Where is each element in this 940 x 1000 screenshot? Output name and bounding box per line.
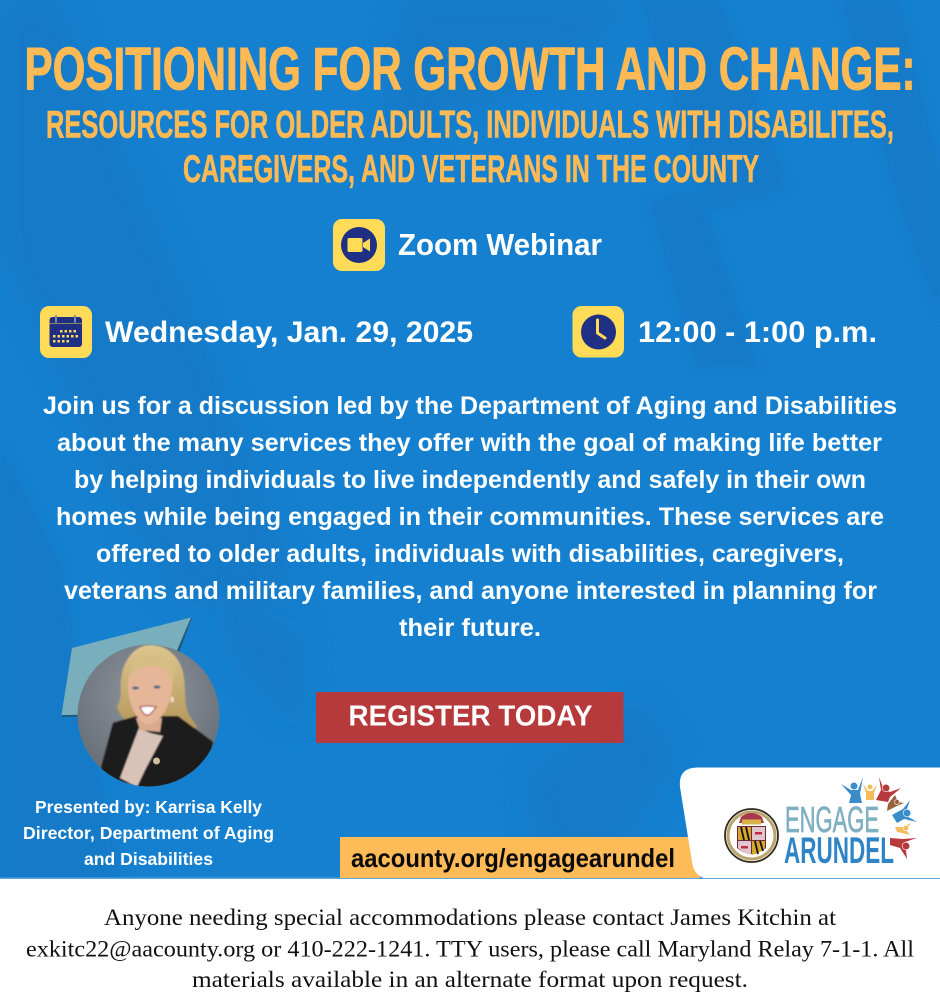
accessibility notice: [0, 879, 940, 1000]
engage arundel logo: ENGAGE: [785, 799, 879, 840]
register button: [316, 692, 624, 743]
accessibility notice: exkitc22@aacounty.org or 410-222-1241. TTY users, please call Maryland Relay 7-1-1. All: [26, 936, 914, 962]
body text: veterans and military families, and anyone interested in planning for: [64, 577, 877, 605]
body text: their future.: [399, 614, 541, 642]
accessibility notice: Anyone needing special accommodations please contact James Kitchin at: [104, 905, 837, 930]
county seal: [725, 809, 778, 862]
body text: Join us for a discussion led by the Department of Aging and Disabilities: [43, 392, 897, 420]
photo: presenter portrait: [77, 644, 220, 790]
icon: clock: [572, 306, 624, 358]
register button: REGISTER TODAY: [348, 700, 592, 732]
url banner: aacounty.org/engagearundel: [351, 843, 675, 873]
icon: video camera: [333, 219, 385, 271]
presenter caption: Presented by: Karrisa Kelly: [35, 797, 262, 817]
time: 12:00 - 1:00 p.m.: [638, 316, 877, 349]
body text: about the many services they offer with the goal of making life better: [57, 429, 882, 457]
decorative teal shape behind photo: [62, 618, 192, 717]
body text: by helping individuals to live independently and safely in their own: [74, 466, 866, 494]
body text: [43, 392, 897, 642]
accessibility notice: materials available in an alternate format upon request.: [192, 967, 748, 992]
subtitle: [46, 104, 894, 191]
body text: homes while being engaged in their communities. These services are: [56, 503, 884, 531]
presenter caption: and Disabilities: [84, 849, 213, 869]
date: Wednesday, Jan. 29, 2025: [105, 316, 473, 349]
format label: Zoom Webinar: [398, 228, 602, 262]
white logo panel: [680, 768, 940, 878]
presenter caption: Director, Department of Aging: [23, 823, 274, 843]
icon: people arc: [841, 777, 917, 859]
icon: calendar: [40, 306, 92, 358]
presenter caption: [23, 797, 274, 869]
body text: offered to older adults, individuals with disabilities, caregivers,: [96, 540, 844, 568]
engage arundel logo: [784, 777, 917, 871]
